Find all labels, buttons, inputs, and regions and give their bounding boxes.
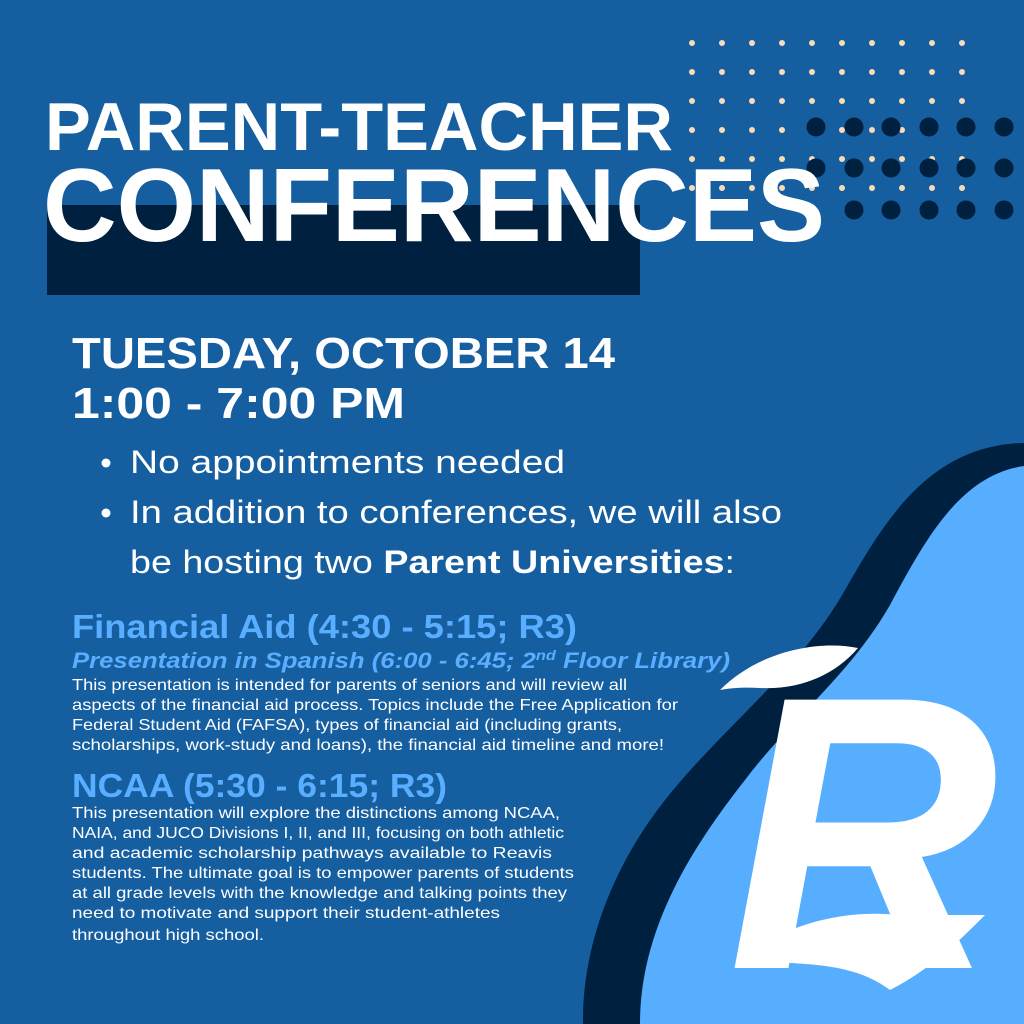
date and time xyxy=(72,329,616,428)
NCAA section xyxy=(72,767,574,944)
NCAA section: and academic scholarship pathways available to Reavis xyxy=(72,845,552,862)
bullet list: No appointments needed xyxy=(130,444,565,480)
financial aid section xyxy=(72,608,730,754)
financial aid section: nd xyxy=(536,647,556,663)
financial aid section: This presentation is intended for parents of seniors and will review all xyxy=(72,677,627,694)
title: PARENT-TEACHER xyxy=(45,89,673,165)
NCAA section: NAIA, and JUCO Divisions I, II, and III, focusing on both athletic xyxy=(72,825,564,842)
title xyxy=(43,89,825,264)
financial aid section: Federal Student Aid (FAFSA), types of financial aid (including grants, xyxy=(72,717,622,734)
navy dot grid xyxy=(806,118,1014,220)
NCAA section: throughout high school. xyxy=(72,927,264,944)
bullet list: be hosting two Parent Universities : xyxy=(130,544,735,580)
NCAA section: NCAA (5:30 - 6:15; R3) xyxy=(72,767,447,804)
bullet list xyxy=(102,444,782,580)
wave: light blue xyxy=(640,466,1024,1024)
NCAA section: This presentation will explore the distinctions among NCAA, xyxy=(72,805,560,822)
NCAA section: students. The ultimate goal is to empower parents of students xyxy=(72,865,574,882)
NCAA section: at all grade levels with the knowledge and talking points they xyxy=(72,885,567,902)
financial aid section: scholarships, work-study and loans), the financial aid timeline and more! xyxy=(72,737,664,754)
title: CONFERENCES xyxy=(43,148,825,264)
financial aid section: aspects of the financial aid process. Topics include the Free Application for xyxy=(72,697,679,714)
financial aid section: Financial Aid (4:30 - 5:15; R3) xyxy=(72,608,577,645)
date and time: 1:00 - 7:00 PM xyxy=(72,379,405,428)
financial aid section: Floor Library) xyxy=(556,648,730,673)
financial aid section: Presentation in Spanish (6:00 - 6:45; 2 xyxy=(72,648,469,673)
decorative dot grid xyxy=(689,40,965,191)
date and time: TUESDAY, OCTOBER 14 xyxy=(72,329,616,378)
NCAA section: need to motivate and support their student-athletes xyxy=(72,905,500,922)
title highlight bar xyxy=(47,205,640,295)
wave: navy xyxy=(583,443,1024,1024)
bullet list: In addition to conferences, we will also xyxy=(130,494,782,530)
